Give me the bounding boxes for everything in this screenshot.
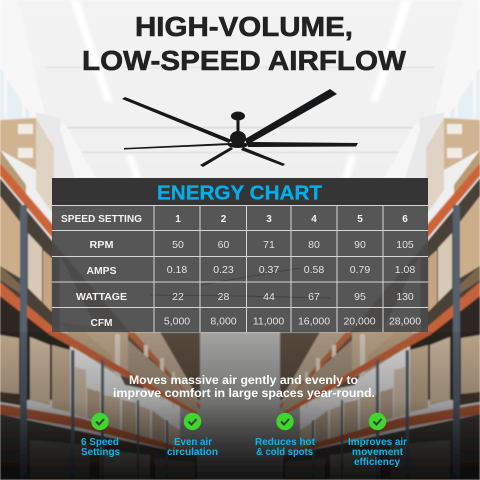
row: wattage: 67 bbox=[308, 291, 320, 303]
label bbox=[81, 436, 120, 458]
chart title band: ENERGY CHART bbox=[157, 182, 322, 204]
label: 6 Speed bbox=[81, 436, 119, 448]
chart title band bbox=[52, 178, 428, 205]
feature: improves air movement efficiency bbox=[348, 413, 407, 468]
title bbox=[82, 11, 406, 76]
header row: speed setting: 6 bbox=[402, 214, 408, 225]
row: RPM: 105 bbox=[396, 239, 414, 251]
row: RPM: 90 bbox=[354, 239, 366, 251]
row: wattage bbox=[76, 291, 414, 303]
row: CFM: 20,000 bbox=[343, 316, 376, 328]
icon: check bbox=[184, 413, 201, 430]
text block: description bbox=[113, 373, 375, 400]
icon: check bbox=[276, 413, 294, 430]
text block: description: improve comfort in large spaces year-round. bbox=[113, 386, 375, 400]
row: wattage: 22 bbox=[172, 291, 184, 303]
row: amps: 0.58 bbox=[304, 264, 324, 276]
label bbox=[167, 436, 218, 458]
header row: speed setting bbox=[61, 214, 408, 225]
header row: speed setting: 2 bbox=[221, 214, 227, 225]
row: wattage: 44 bbox=[263, 291, 275, 303]
panel: energy chart table bbox=[52, 178, 428, 332]
icon: check bbox=[91, 413, 109, 430]
label: efficiency bbox=[354, 456, 400, 468]
row: amps: 0.37 bbox=[259, 264, 279, 276]
row: amps: 1.08 bbox=[395, 264, 415, 276]
feature: 6 speed settings bbox=[81, 413, 120, 458]
header row: speed setting: 1 bbox=[175, 214, 181, 225]
row: amps: AMPS bbox=[86, 265, 116, 277]
table body bbox=[52, 205, 428, 332]
row: RPM: 50 bbox=[172, 239, 184, 251]
label bbox=[348, 436, 407, 468]
row: CFM bbox=[90, 316, 421, 329]
label: Reduces hot bbox=[255, 436, 315, 448]
row: CFM: CFM bbox=[90, 317, 113, 329]
title: LOW-SPEED AIRFLOW bbox=[82, 45, 406, 76]
label: movement bbox=[352, 446, 403, 458]
row: RPM: RPM bbox=[90, 239, 114, 251]
row: amps: 0.23 bbox=[213, 264, 234, 276]
header row: speed setting: 3 bbox=[266, 214, 272, 225]
row: RPM bbox=[90, 239, 414, 251]
feature: reduces hot and cold spots bbox=[255, 413, 315, 458]
row: wattage: 130 bbox=[396, 291, 414, 303]
text block: description: Moves massive air gently and evenly to bbox=[129, 373, 358, 387]
label: circulation bbox=[167, 446, 218, 458]
row: amps: 0.18 bbox=[167, 264, 187, 276]
row: CFM: 11,000 bbox=[253, 316, 284, 328]
label: Even air bbox=[174, 436, 212, 448]
row: CFM: 28,000 bbox=[389, 316, 421, 328]
row: CFM: 16,000 bbox=[298, 316, 330, 328]
icon: ceiling fan bbox=[122, 89, 358, 167]
row: RPM: 71 bbox=[263, 239, 275, 251]
row: RPM: 60 bbox=[218, 239, 229, 251]
row: amps bbox=[86, 264, 415, 277]
label: Improves air bbox=[348, 436, 407, 448]
label: Settings bbox=[81, 446, 120, 458]
header row: speed setting: SPEED SETTING bbox=[61, 214, 142, 225]
row: wattage: 28 bbox=[218, 291, 229, 303]
row: RPM: 80 bbox=[308, 239, 320, 251]
row: amps: 0.79 bbox=[350, 264, 370, 276]
label bbox=[255, 436, 315, 458]
row: CFM: 5,000 bbox=[164, 316, 190, 328]
row: wattage: 95 bbox=[354, 291, 366, 303]
row: wattage: WATTAGE bbox=[76, 291, 127, 303]
header row: speed setting: 4 bbox=[311, 214, 317, 225]
row: CFM: 8,000 bbox=[210, 316, 237, 328]
icon: check bbox=[369, 413, 386, 430]
label: & cold spots bbox=[256, 446, 313, 458]
header row: speed setting: 5 bbox=[357, 214, 363, 225]
feature: even air circulation bbox=[167, 413, 218, 458]
title: HIGH-VOLUME, bbox=[135, 11, 353, 42]
